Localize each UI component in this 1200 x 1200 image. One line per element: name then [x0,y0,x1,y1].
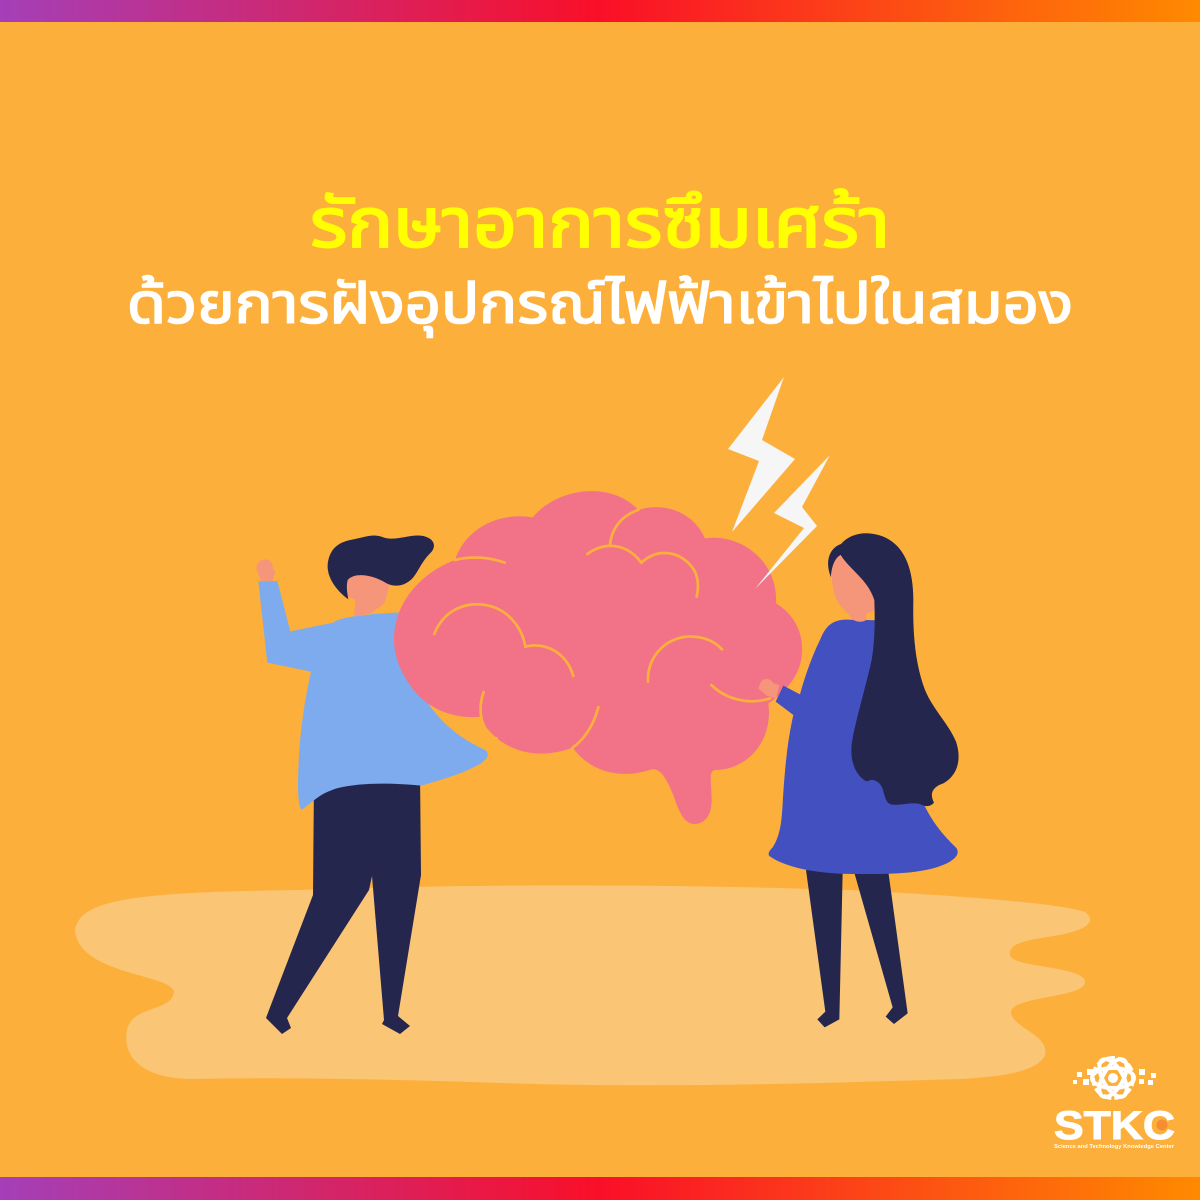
woman: dress [769,620,958,874]
logo: orange dot [1156,1120,1168,1130]
brain: silhouette [394,491,802,824]
title line 1: รักษาอาการซึมเศร้า [310,185,890,262]
woman: hair [828,533,959,806]
bottom gradient bar [0,1177,1200,1200]
woman: legs [806,870,908,1027]
woman [758,533,959,1027]
title [127,185,1073,337]
brain [394,491,802,824]
logo: pixel squares [1073,1069,1156,1085]
top gradient bar [0,0,1200,22]
bolt 1 [728,377,795,532]
brain: fold lines [434,510,770,748]
logo: tagline: Science and Technology Knowledge Center [1054,1144,1174,1150]
man: upper body [257,535,488,809]
woman: hand [758,679,779,698]
bolt 2 [755,455,830,589]
man: hair [328,535,434,599]
man: sweater [258,581,488,809]
man [257,535,488,1034]
man: trousers [266,772,421,1034]
lightning bolts [728,377,830,589]
woman: face [832,555,877,622]
logo: STKC wordmark: STKC [1054,1104,1175,1148]
STKC logo [1054,1055,1175,1150]
ground puddle [75,885,1090,1085]
man: fist [257,559,275,581]
logo: atom icon [1092,1055,1134,1101]
man: neck and face [347,575,390,617]
title line 2: ด้วยการฝังอุปกรณ์ไฟฟ้าเข้าไปในสมอง [127,272,1073,337]
